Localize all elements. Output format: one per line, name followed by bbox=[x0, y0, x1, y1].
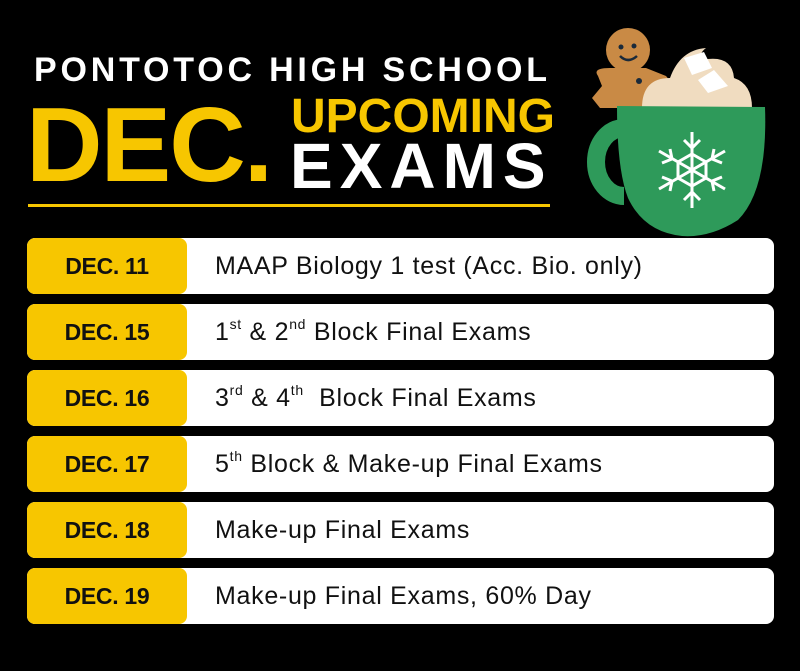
gingerbread bbox=[592, 28, 669, 108]
row: Dec 17: DEC. 17 bbox=[65, 451, 149, 477]
title: school name: PONTOTOC HIGH SCHOOL bbox=[34, 51, 551, 89]
title: DEC.: DEC. bbox=[26, 86, 271, 204]
row: Dec 17: 5th Block & Make-up Final Exams bbox=[215, 448, 603, 478]
title: EXAMS: EXAMS bbox=[290, 130, 553, 202]
row: Dec 18: Make-up Final Exams bbox=[215, 516, 470, 544]
row: Dec 16 bbox=[27, 370, 774, 426]
row: Dec 18 bbox=[27, 502, 774, 558]
title: UPCOMING: UPCOMING bbox=[291, 90, 555, 143]
mug body bbox=[617, 106, 765, 236]
row: Dec 16: DEC. 16 bbox=[65, 385, 149, 411]
row: Dec 15: 1st & 2nd Block Final Exams bbox=[215, 316, 531, 346]
row: Dec 15: DEC. 15 bbox=[65, 319, 149, 345]
row: Dec 15 bbox=[27, 304, 774, 360]
row: Dec 19: DEC. 19 bbox=[65, 583, 149, 609]
row: Dec 18: DEC. 18 bbox=[65, 517, 149, 543]
mug handle bbox=[596, 128, 624, 196]
underline bbox=[28, 204, 550, 207]
row: Dec 11 bbox=[27, 238, 774, 294]
row: Dec 19 bbox=[27, 568, 774, 624]
whipped cream bbox=[642, 48, 752, 108]
row: Dec 17 bbox=[27, 436, 774, 492]
row: Dec 19: Make-up Final Exams, 60% Day bbox=[215, 582, 592, 610]
row: Dec 16: 3rd & 4th Block Final Exams bbox=[215, 382, 537, 412]
row: Dec 11: DEC. 11 bbox=[65, 253, 149, 279]
row: Dec 11: MAAP Biology 1 test (Acc. Bio. only) bbox=[215, 252, 643, 280]
icon: cocoa mug with gingerbread bbox=[587, 28, 766, 236]
